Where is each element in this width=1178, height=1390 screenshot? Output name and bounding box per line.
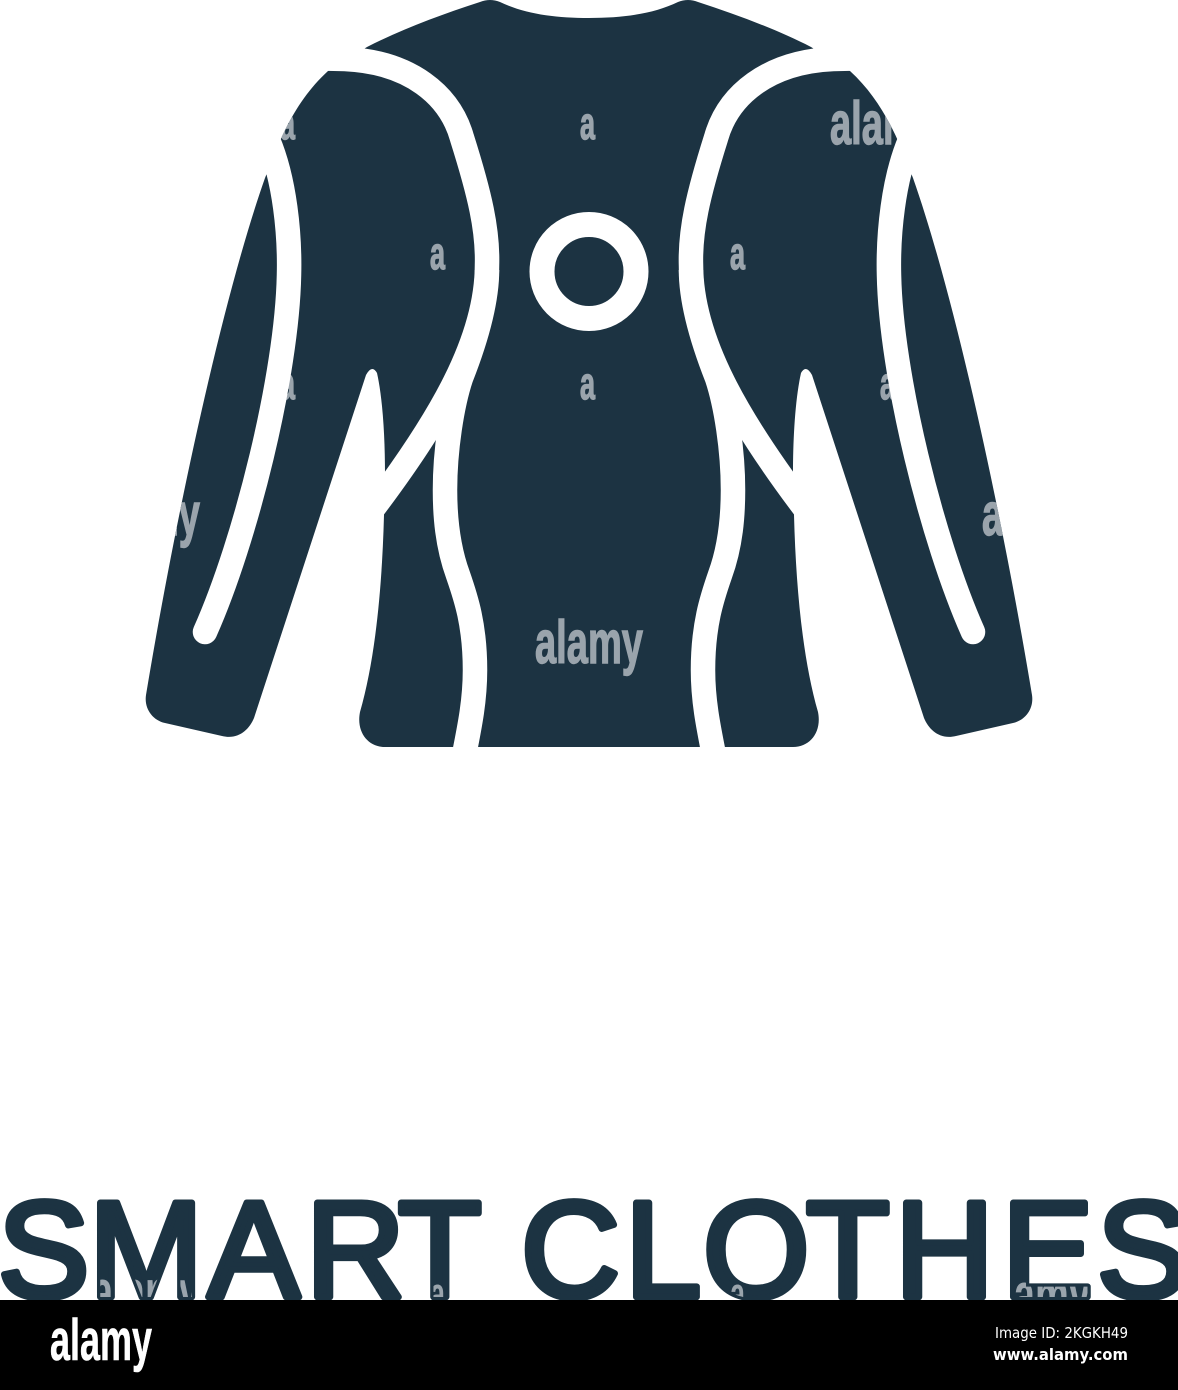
jacket silhouette: [146, 0, 1032, 747]
website: www.alamy.com: [993, 1345, 1128, 1364]
right seams: [691, 58, 973, 755]
watermarks on jacket: a: [280, 358, 296, 409]
watermarks on jacket: [175, 99, 1003, 676]
chest sensor ring: [542, 224, 636, 318]
watermarks on jacket: a: [580, 98, 596, 149]
watermarks on jacket: a: [580, 358, 596, 409]
watermarks on jacket: alamy: [535, 609, 643, 676]
watermarks on jacket: alamy: [830, 90, 938, 157]
title: SMART CLOTHES: [0, 1174, 1178, 1327]
watermarks on jacket: alamy: [92, 481, 200, 548]
watermarks on jacket: a: [880, 358, 896, 409]
watermarks on jacket: a: [280, 98, 296, 149]
watermarks on jacket: a: [430, 228, 446, 279]
left seams: [205, 58, 487, 755]
watermarks on title: a: [430, 1268, 446, 1319]
watermarks on title: alamy: [982, 1261, 1090, 1330]
watermarks on jacket: a: [730, 228, 746, 279]
icon: smart jacket: [146, 0, 1032, 747]
watermarks on jacket: alamy: [982, 481, 1090, 548]
footer logo: alamy: [50, 1308, 152, 1373]
watermarks on title: a: [730, 1268, 746, 1319]
watermarks on title: [100, 1280, 1088, 1297]
watermarks on title: alamy: [92, 1258, 200, 1327]
footer bar: [0, 1300, 1178, 1390]
image id: Image ID: 2KGKH49: [995, 1324, 1128, 1342]
